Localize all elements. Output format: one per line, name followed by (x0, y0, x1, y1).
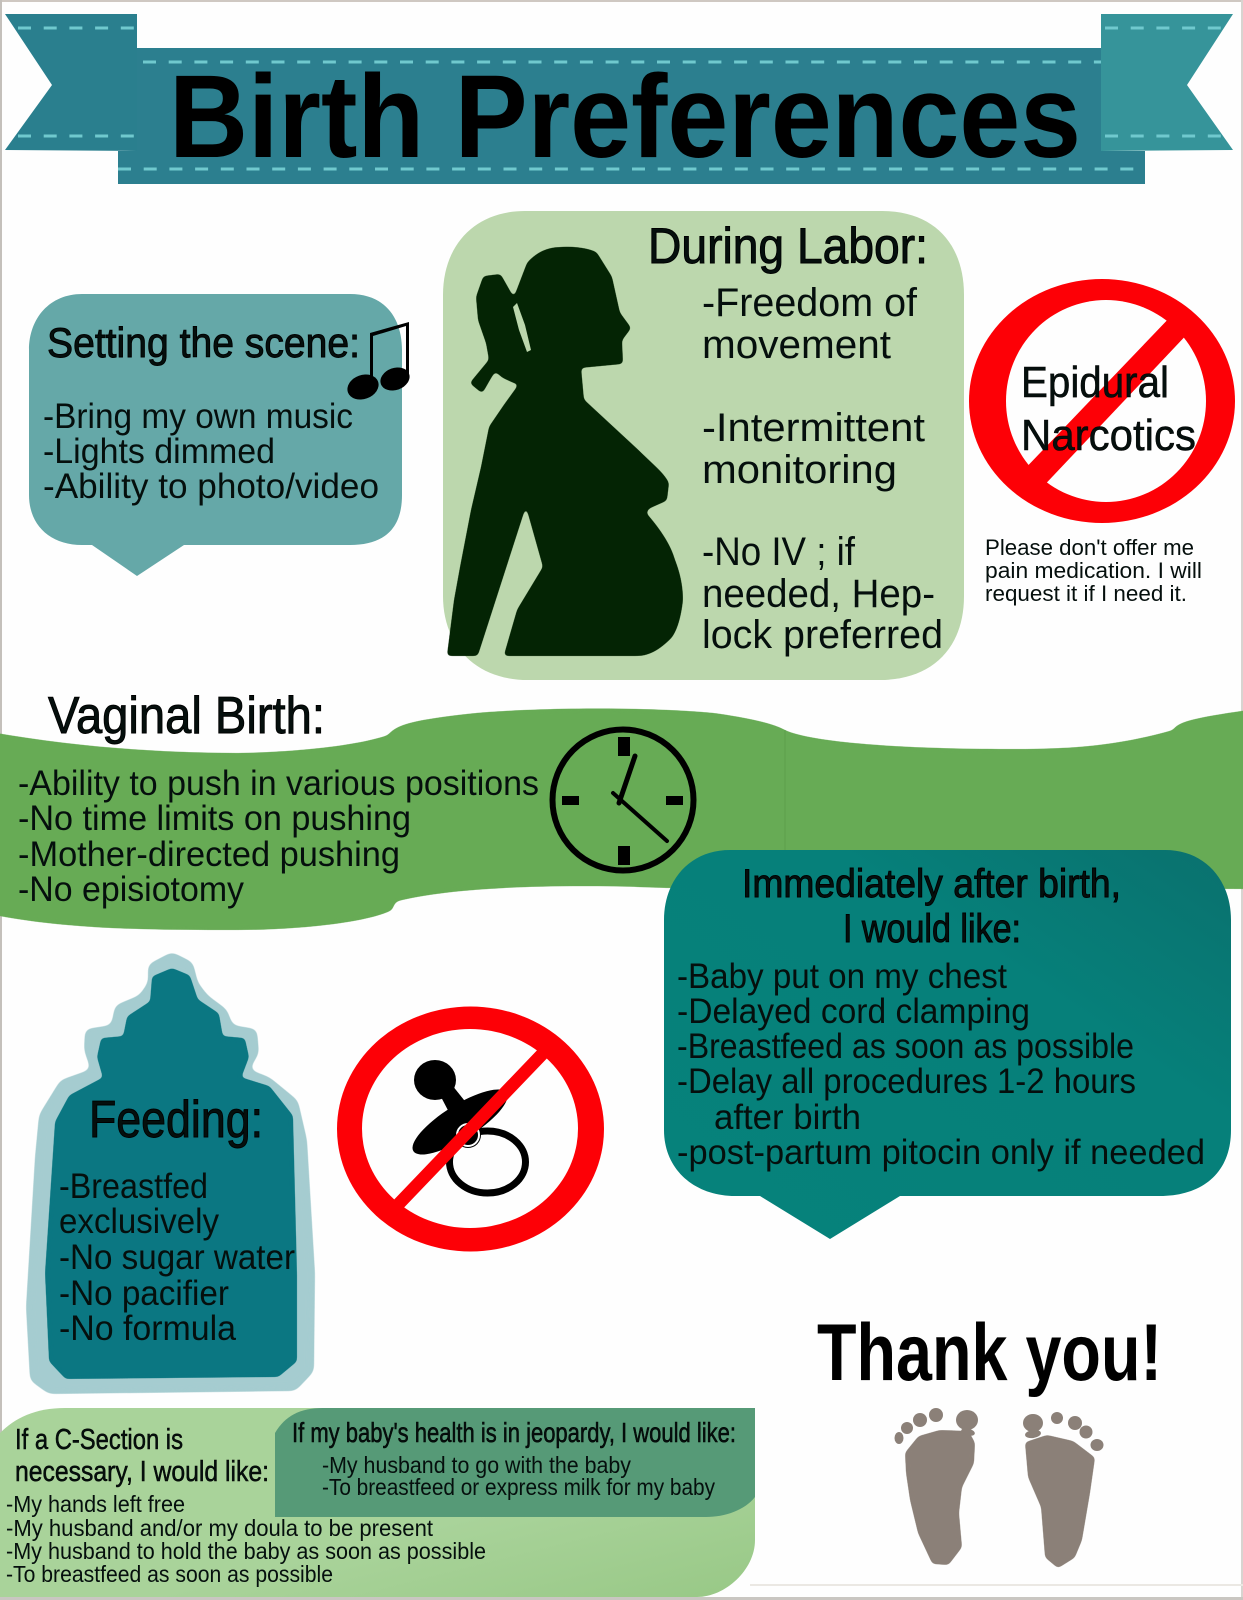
title banner (5, 14, 1233, 184)
heading: c-section: necessary, I would like: (15, 1456, 269, 1488)
text: pain medication note: request it if I need it. (985, 581, 1187, 606)
panel: c-section (0, 1408, 755, 1597)
setting the scene list: -Lights dimmed (43, 432, 275, 471)
panel: feeding bottle (27, 953, 314, 1393)
feeding list: -No formula (59, 1309, 237, 1348)
heading: thank you: Thank you! (817, 1308, 1162, 1398)
label: epidural narcotics (1021, 358, 1196, 460)
label: epidural narcotics: Narcotics (1021, 411, 1196, 460)
text: pain medication note: Please don't offer me (985, 535, 1194, 560)
text: pain medication note (985, 535, 1202, 606)
icon: music notes (344, 322, 413, 404)
labor preferences list: movement (702, 323, 891, 367)
heading: feeding: Feeding: (89, 1091, 263, 1149)
setting the scene list: -Ability to photo/video (43, 467, 379, 506)
c-section list: -My hands left free (6, 1491, 185, 1517)
labor preferences list: -Intermittent (702, 406, 925, 450)
after birth list: -Baby put on my chest (677, 957, 1007, 996)
panel: vaginal birth ribbon (0, 687, 1243, 930)
setting the scene list (43, 397, 379, 506)
labor preferences list: lock preferred (702, 613, 943, 657)
feeding list: exclusively (59, 1202, 219, 1241)
heading: setting the scene: Setting the scene: (47, 319, 360, 366)
vaginal birth list: -Ability to push in various positions (18, 764, 539, 803)
banner main ribbon (118, 48, 1145, 184)
labor preferences list: -Freedom of (702, 281, 918, 325)
labor preferences list (702, 281, 943, 657)
jeopardy list: -To breastfeed or express milk for my baby (322, 1474, 715, 1500)
after birth list: -post-partum pitocin only if needed (677, 1133, 1205, 1172)
icon: pacifier (404, 1060, 526, 1193)
icon: right foot (1023, 1412, 1104, 1567)
setting the scene list: -Bring my own music (43, 397, 353, 436)
heading: c-section: If a C-Section is (15, 1424, 183, 1456)
title: Birth Preferences (169, 51, 1081, 183)
after birth list: -Delay all procedures 1-2 hours (677, 1062, 1136, 1101)
icon: no epidural sign (969, 279, 1235, 523)
feeding list: -No pacifier (59, 1274, 229, 1313)
icon: baby footprints (894, 1408, 1104, 1567)
banner left tail (5, 14, 137, 151)
feeding list: -No sugar water (59, 1238, 295, 1277)
jeopardy list (322, 1452, 715, 1500)
icon: clock (552, 730, 694, 870)
c-section list: -My husband and/or my doula to be present (6, 1515, 434, 1541)
labor preferences list: monitoring (702, 448, 897, 492)
panel: baby in jeopardy (275, 1408, 755, 1517)
heading: vaginal birth: Vaginal Birth: (48, 687, 325, 745)
label: epidural narcotics: Epidural (1021, 358, 1169, 407)
labor preferences list: needed, Hep- (702, 572, 935, 616)
c-section list (6, 1491, 486, 1587)
c-section list: -My husband to hold the baby as soon as possible (6, 1538, 486, 1564)
after birth list: -Breastfeed as soon as possible (677, 1027, 1134, 1066)
heading: immediately after birth: I would like: (843, 907, 1021, 951)
vaginal birth list: -No episiotomy (18, 870, 244, 909)
heading: c-section (15, 1424, 269, 1488)
after birth list: -Delayed cord clamping (677, 992, 1030, 1031)
vaginal birth list (18, 764, 539, 909)
jeopardy list: -My husband to go with the baby (322, 1452, 631, 1478)
icon: left foot (894, 1408, 978, 1564)
heading: immediately after birth (742, 862, 1121, 951)
panel: immediately after birth (664, 850, 1231, 1239)
icon: pregnant silhouette (448, 248, 682, 655)
panel: setting the scene (29, 294, 413, 576)
labor preferences list: -No IV ; if (702, 530, 856, 574)
after birth list: after birth (714, 1098, 861, 1137)
vaginal birth list: -Mother-directed pushing (18, 835, 400, 874)
panel: during labor (443, 211, 964, 680)
icon: no pacifier sign (337, 1006, 604, 1252)
after birth list (677, 957, 1205, 1172)
heading: during labor: During Labor: (648, 218, 928, 274)
c-section list: -To breastfeed as soon as possible (6, 1561, 333, 1587)
banner right tail (1101, 14, 1233, 151)
feeding list: -Breastfed (59, 1167, 208, 1206)
heading: baby in jeopardy: If my baby's health is in jeopardy, I would like: (292, 1417, 736, 1448)
text: pain medication note: pain medication. I will (985, 558, 1202, 583)
vaginal birth list: -No time limits on pushing (18, 799, 411, 838)
feeding list (59, 1167, 295, 1348)
heading: immediately after birth: Immediately after birth, (742, 862, 1121, 906)
